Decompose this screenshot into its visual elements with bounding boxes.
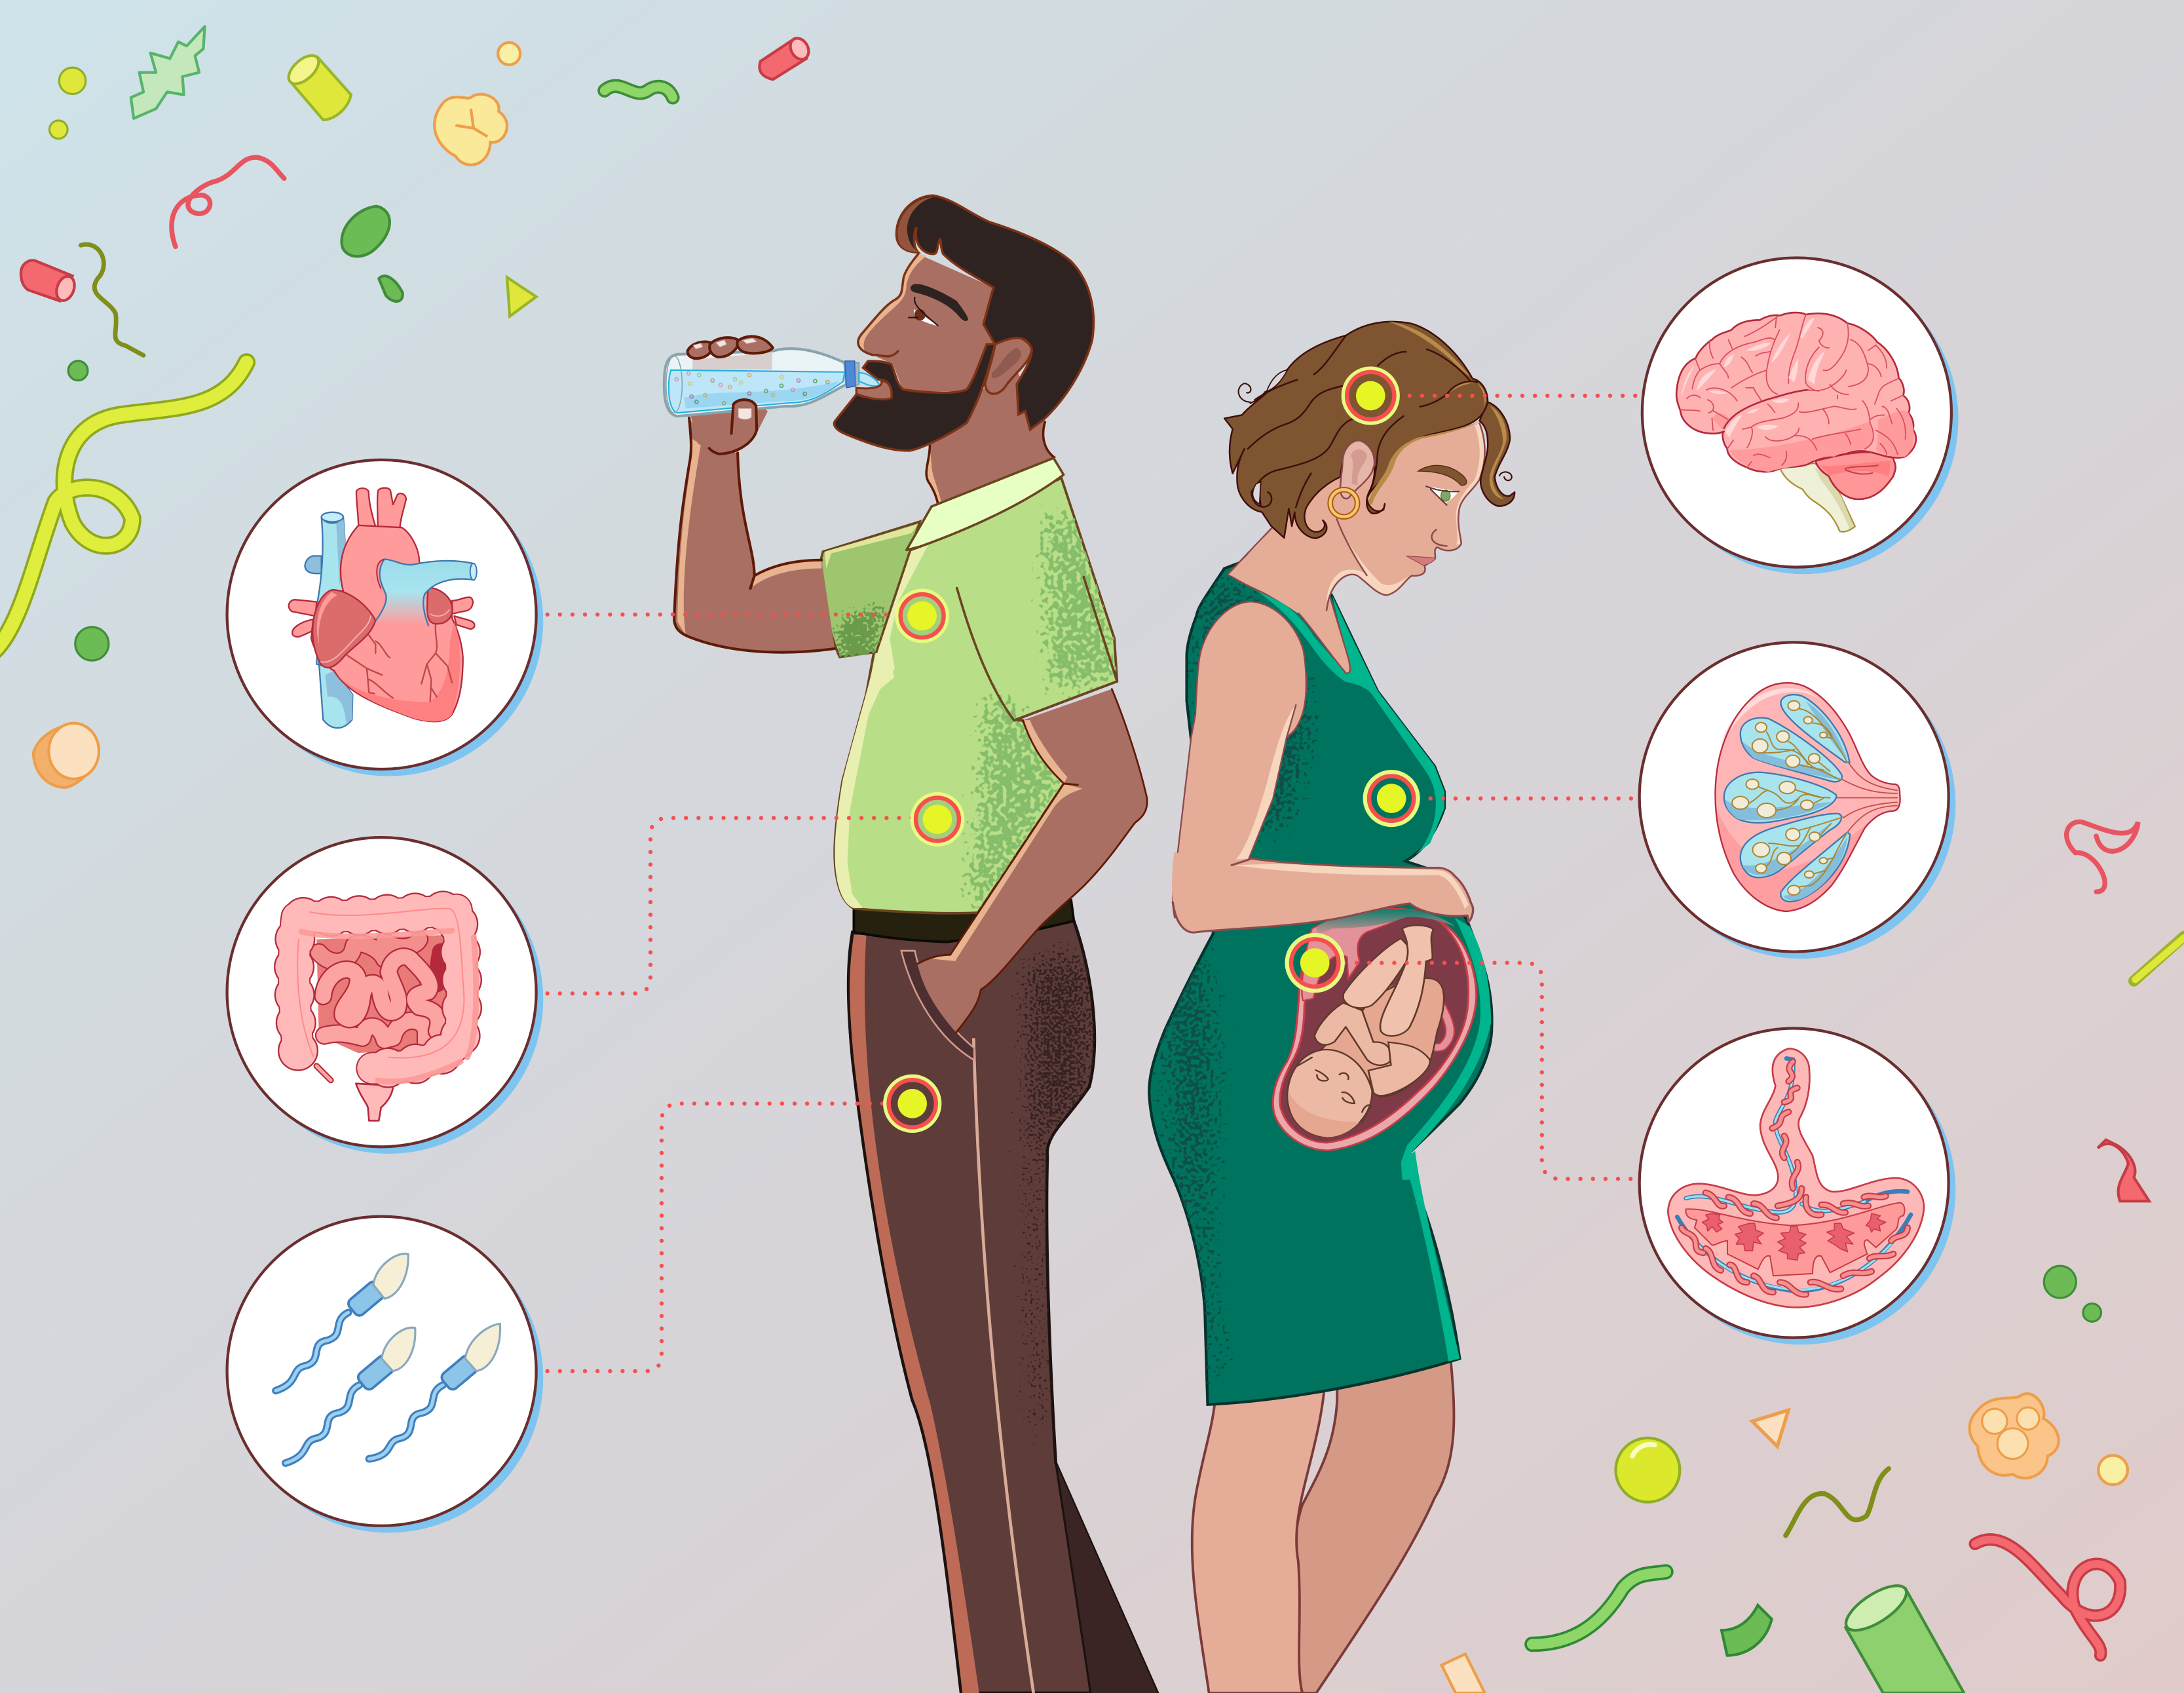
man: face [858, 254, 995, 391]
plastic bottle with water [664, 349, 880, 416]
fetus forearm [1368, 1042, 1430, 1095]
woman: forearm and hand [1172, 852, 1473, 932]
man: fingers and thumb [688, 336, 773, 454]
top fade [1317, 909, 1455, 935]
panel: heart [227, 460, 543, 776]
panel: breast tissue [1640, 642, 1955, 959]
panel: placenta [1640, 1029, 1955, 1344]
woman: right hair lock [1480, 402, 1515, 506]
man: collar [907, 458, 1064, 550]
man: eye [908, 297, 938, 326]
icon: sperm top [276, 1254, 408, 1390]
man: belt [854, 900, 1074, 942]
man: lip [856, 381, 892, 400]
man: raised arm [674, 418, 835, 653]
woman: face and neck [1228, 423, 1485, 613]
woman: chest skin, upper arm [1173, 550, 1350, 918]
woman: brow [1418, 465, 1467, 485]
fetus head [1287, 1050, 1372, 1137]
woman: lips [1406, 556, 1435, 565]
icon: sperm right [369, 1323, 500, 1459]
red dotted connector lines [548, 396, 1641, 1371]
pregnant belly detail [1172, 852, 1477, 1151]
fetus torso [1322, 978, 1444, 1097]
man: ear [985, 337, 1032, 394]
woman: earring [1330, 489, 1357, 517]
icon: placenta and umbilical cord [1668, 1048, 1924, 1308]
umbilical cord [1377, 988, 1450, 1048]
man: hair [896, 195, 1093, 430]
fetus upper thigh [1344, 938, 1412, 1008]
man: eyebrow [911, 284, 968, 321]
marker: placenta [1287, 935, 1343, 991]
woman: dress [1142, 558, 1492, 1407]
floating particles bottom right [1442, 822, 2184, 1693]
floating particles top left [0, 26, 812, 788]
marker: intestine [913, 794, 962, 845]
man: trousers [848, 921, 1158, 1693]
man: beard [835, 345, 995, 451]
woman figure [1142, 321, 1515, 1693]
man: rear arm in pocket [918, 689, 1147, 1033]
man: nails [693, 338, 757, 419]
uterus [1273, 909, 1477, 1151]
man: sleeve [821, 522, 920, 669]
placenta on uterus wall [1302, 912, 1404, 1000]
marker: brain [1344, 369, 1398, 423]
man: hand back [691, 401, 768, 452]
woman: front leg [1192, 1365, 1326, 1693]
woman: eye [1426, 486, 1459, 505]
man: head, raised arm and bottle [664, 195, 1093, 653]
woman: ear [1340, 440, 1374, 499]
panel: sperm cells [227, 1217, 543, 1532]
man: neck [923, 371, 1055, 505]
woman: rear leg [1292, 1338, 1454, 1693]
icon: heart [289, 488, 477, 728]
fetus lower leg and foot [1380, 925, 1433, 1036]
panel: intestine [227, 837, 543, 1154]
man: shirt body [835, 478, 1135, 920]
man figure [664, 195, 1158, 1693]
marker: heart [897, 591, 947, 641]
icon: mammary gland [1715, 683, 1900, 911]
woman: head [1224, 321, 1515, 613]
icon: brain [1676, 313, 1916, 532]
icon: intestines [294, 909, 476, 1120]
icon: sperm middle [286, 1327, 415, 1463]
man: trouser pocket [901, 951, 974, 1060]
marker: breast [1365, 772, 1418, 825]
panel: brain [1642, 257, 1959, 574]
marker: testis [885, 1076, 939, 1131]
woman: hair [1224, 321, 1488, 539]
fetus near arm [1315, 1003, 1392, 1065]
